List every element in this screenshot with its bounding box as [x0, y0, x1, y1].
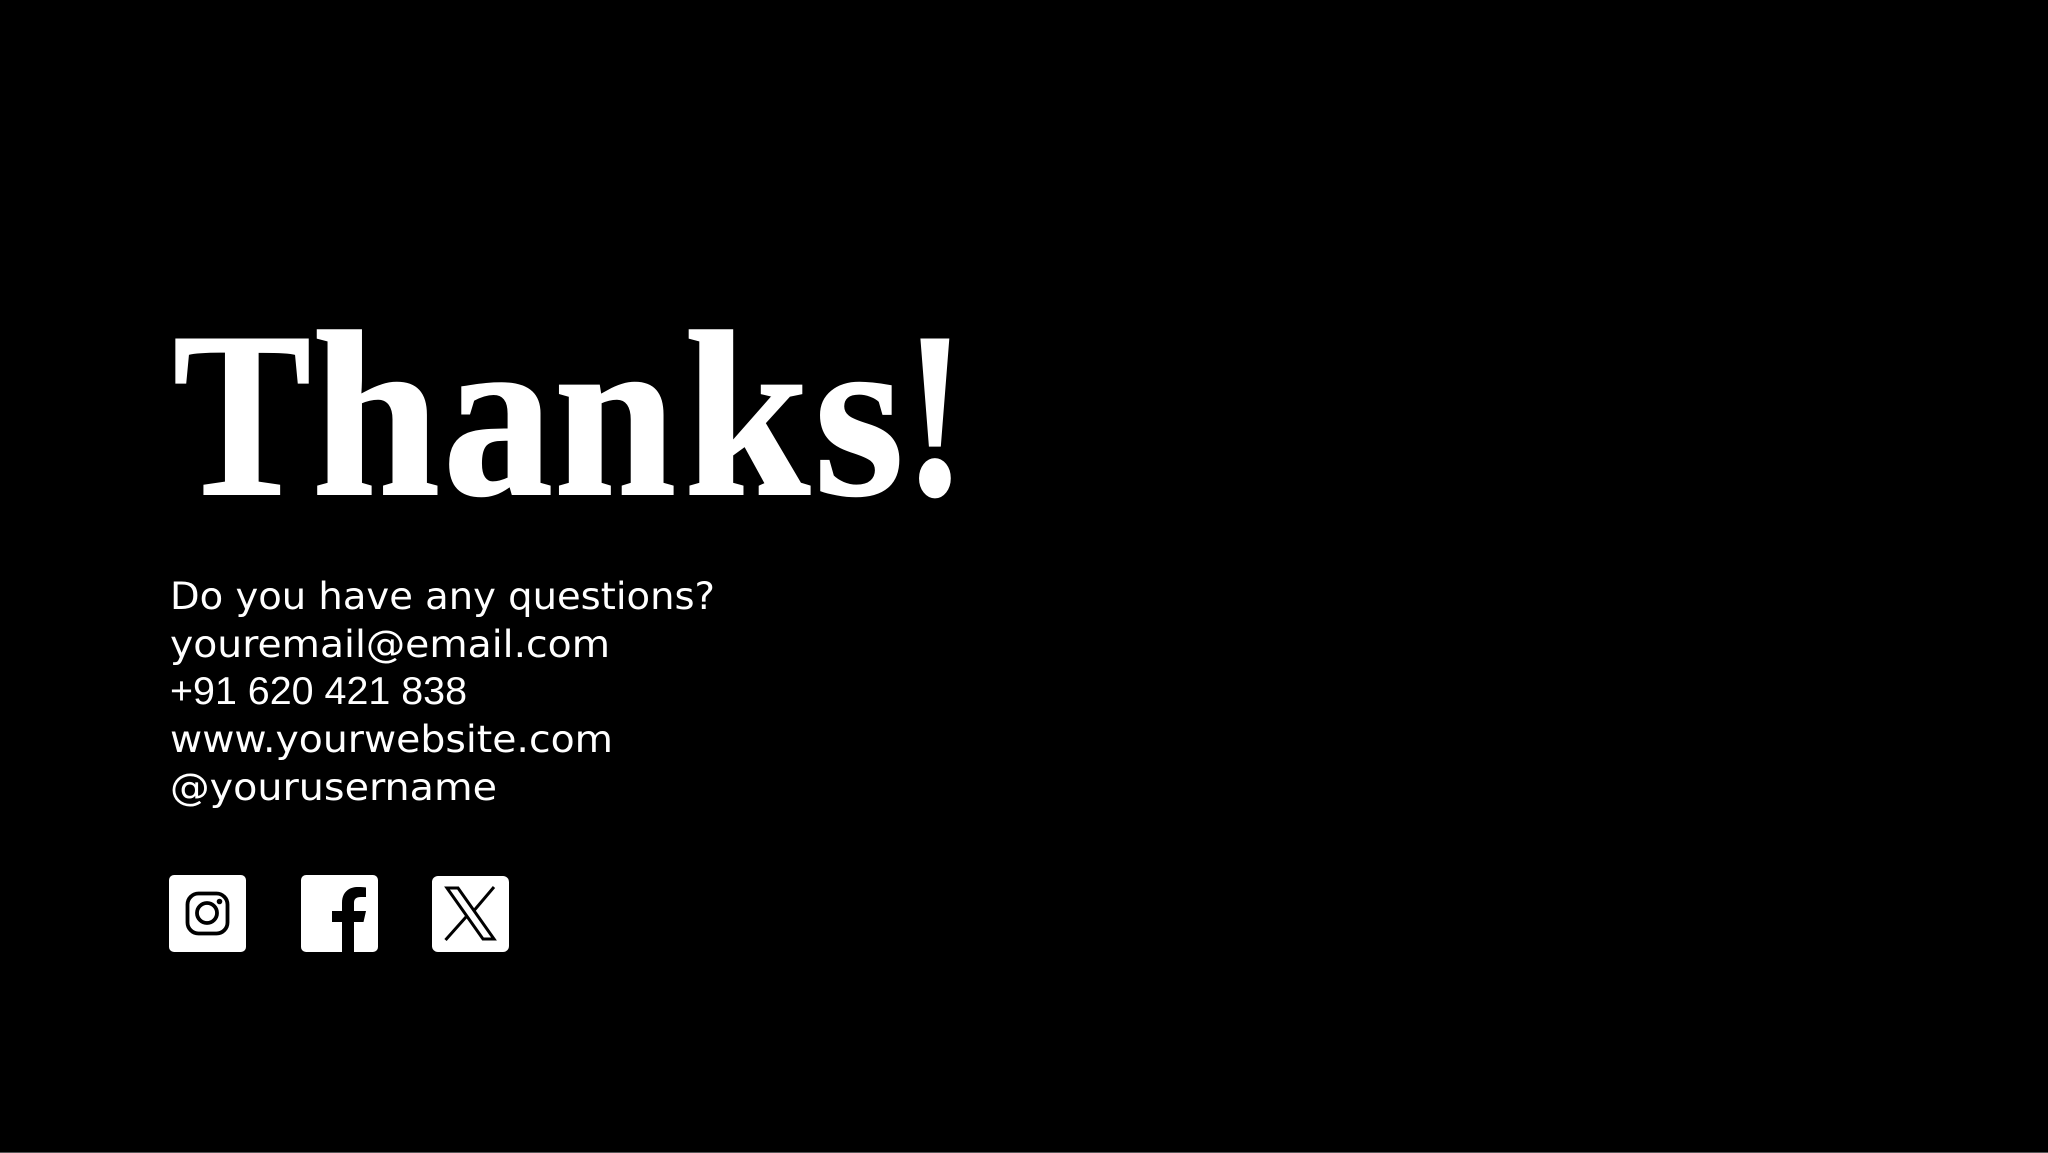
title: Thanks!: k: [684, 285, 810, 546]
title: Thanks!: !: [904, 285, 966, 546]
title: Thanks!: n: [554, 285, 676, 546]
contact details text block: youremail@email.com: [170, 623, 610, 666]
contact details text block: www.yourwebsite.com: [170, 718, 613, 761]
title: Thanks!: a: [443, 285, 553, 546]
title: Thanks!: h: [312, 285, 440, 546]
contact details text block: +91 620 421 838: [170, 670, 467, 713]
contact details text block: Do you have any questions?: [170, 575, 715, 618]
title: Thanks!: T: [173, 285, 311, 546]
icon: X: [432, 876, 509, 952]
icon: Facebook: [301, 875, 378, 952]
contact details text block: @yourusername: [170, 766, 497, 809]
title: Thanks!: s: [814, 285, 904, 546]
icon: Instagram: [169, 875, 246, 952]
contact details text block: [170, 575, 715, 809]
